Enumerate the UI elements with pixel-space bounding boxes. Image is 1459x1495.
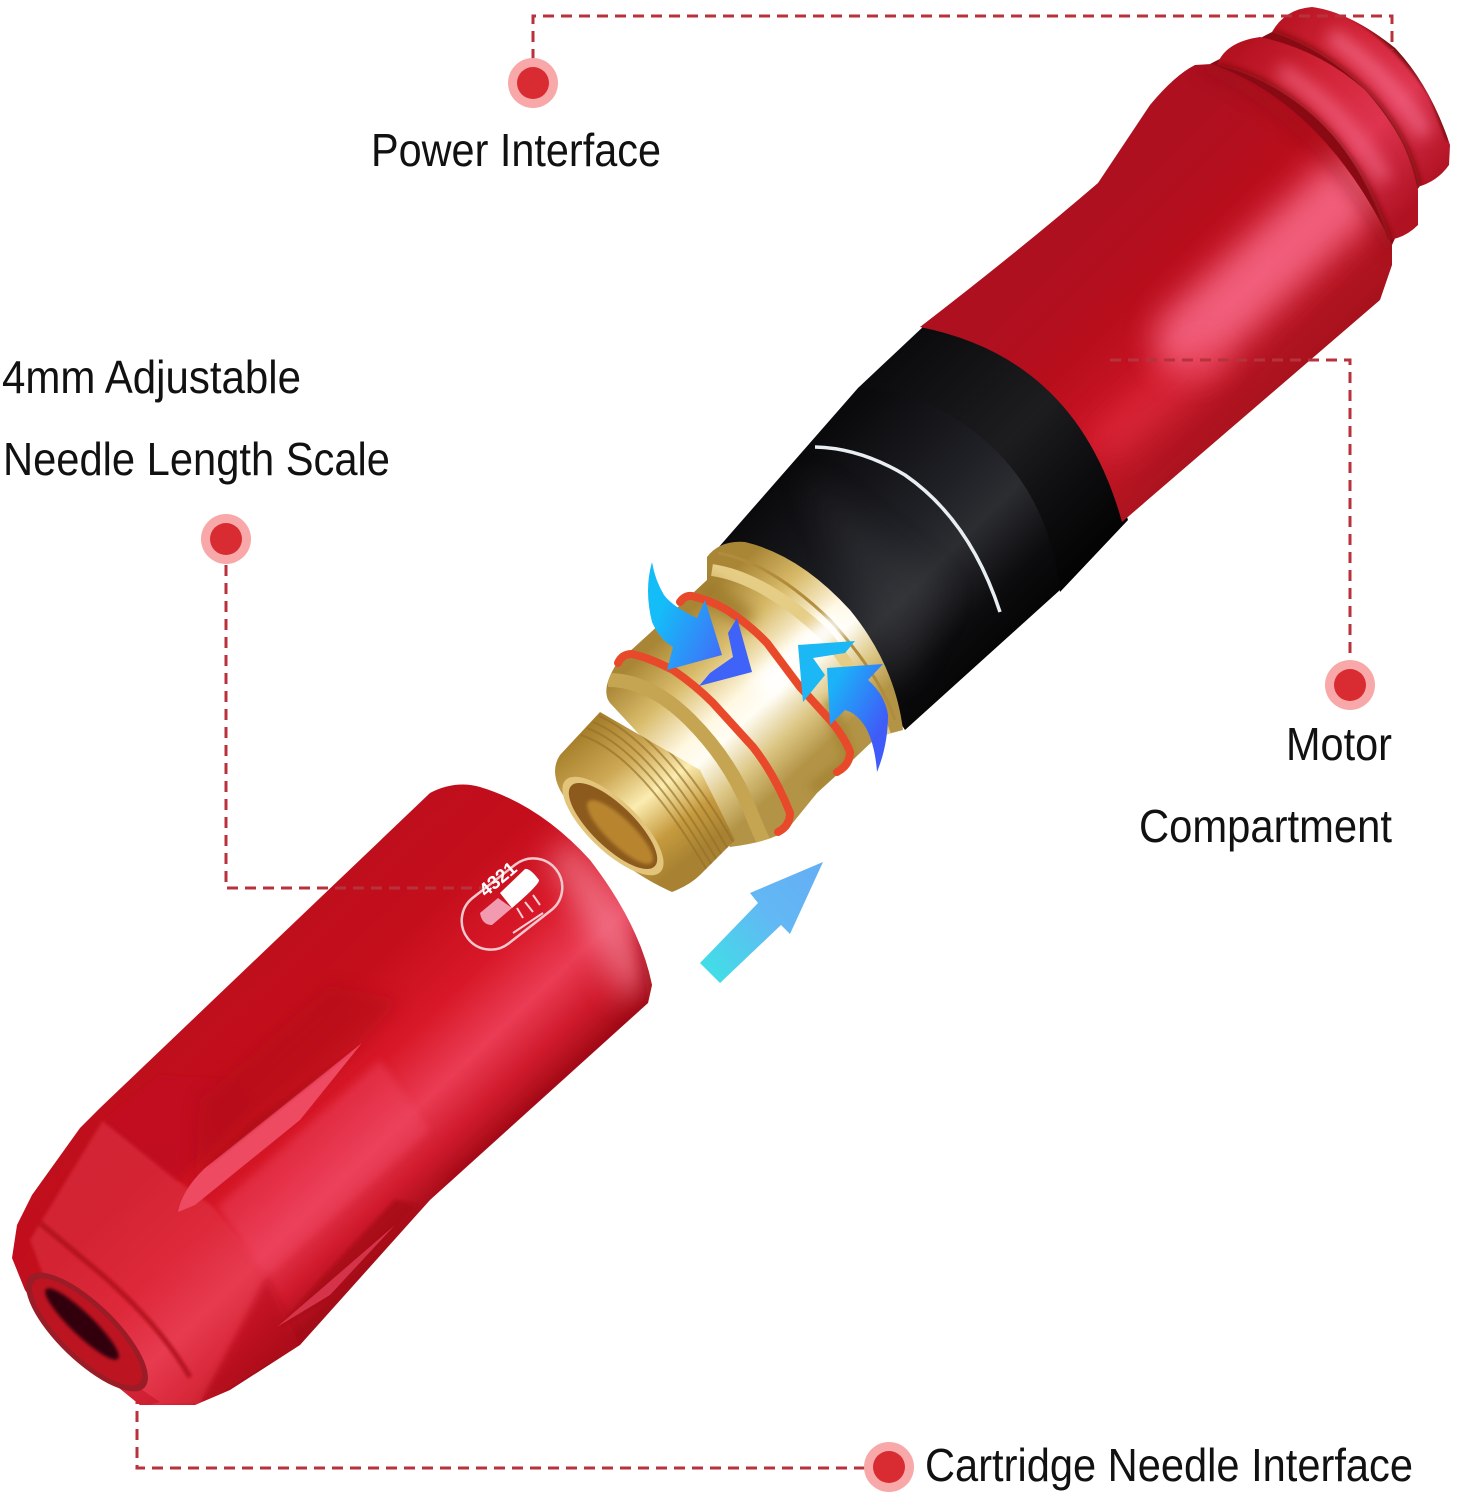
label (1139, 718, 1392, 852)
leader line (226, 565, 482, 888)
marker dot (201, 514, 251, 564)
dashed leader: cartridge needle interface (137, 1375, 866, 1468)
cap ring: second step (1217, 37, 1418, 242)
leader line (1110, 360, 1350, 660)
threaded tip (555, 712, 735, 892)
scale digits: 4321 (476, 858, 522, 901)
marker dot (1325, 660, 1375, 710)
callout: motor compartment (1110, 360, 1392, 852)
brass body (606, 542, 903, 847)
marker dot (864, 1442, 914, 1492)
tick marks (513, 895, 543, 933)
label: Motor (1286, 718, 1392, 770)
arrow: assembly direction (700, 862, 823, 983)
nose opening (9, 1256, 165, 1408)
black sleeve (718, 325, 1128, 730)
grip facets (30, 1120, 267, 1405)
sleeve highlight ring (815, 447, 1000, 612)
slot (480, 898, 512, 925)
leader line (533, 16, 1392, 60)
marker dot (508, 58, 558, 108)
slider (500, 869, 539, 908)
o-ring: front (618, 654, 790, 832)
arrow: chevron cyan (798, 641, 855, 702)
cap ring: end flange (1272, 7, 1450, 190)
arrow: chevron blue (699, 618, 752, 686)
lower grip barrel (9, 785, 655, 1410)
flute: upper (178, 1043, 362, 1212)
label: Compartment (1139, 800, 1392, 852)
motor body upper barrel (920, 64, 1392, 522)
label: Needle Length Scale (3, 433, 390, 485)
threaded bore (548, 762, 678, 890)
brass connector (548, 542, 903, 892)
label: 4mm Adjustable (2, 351, 301, 403)
label: Power Interface (371, 124, 661, 176)
black collar band (858, 325, 1128, 592)
flute: lower (280, 1200, 418, 1327)
callout: needle length scale (2, 351, 482, 888)
cap groove backing (1210, 32, 1450, 245)
callout: cartridge needle interface (864, 1439, 1413, 1492)
callout: power interface (371, 16, 1392, 176)
label: Cartridge Needle Interface (925, 1439, 1413, 1491)
label (2, 351, 390, 485)
scale window: 4321 needle length (450, 847, 574, 961)
nose shoulder groove (40, 1223, 190, 1377)
arrow: curved blue left (648, 562, 722, 670)
o-ring: rear (680, 596, 850, 772)
arrow: curved blue right (827, 664, 888, 772)
